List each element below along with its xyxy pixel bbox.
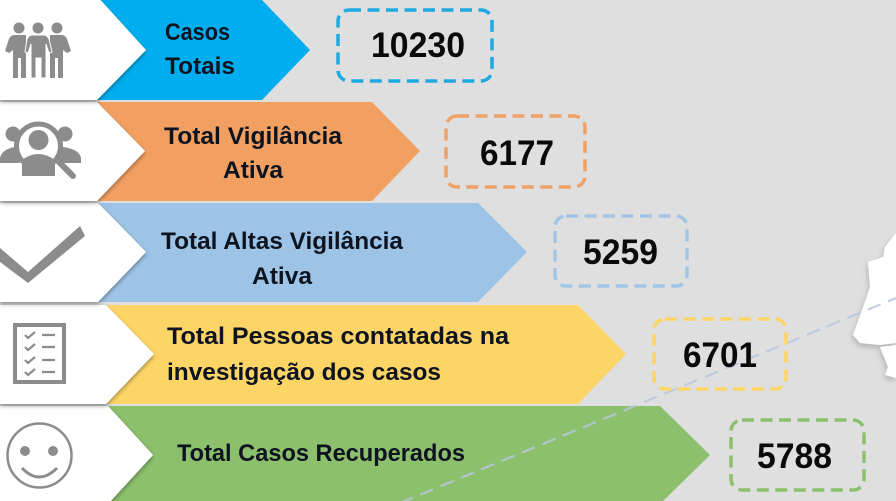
arrow: recovered [108,406,710,501]
band 1: total cases [0,0,310,100]
icon: check mark [0,226,85,283]
value box: 6177: 6177 [480,134,554,173]
band 4: contacted people [0,305,626,404]
value box: 6701: 6701 [683,336,757,375]
band 2: active surveillance [0,102,420,201]
label: Ativa [252,263,313,290]
label: Total Pessoas contatadas na [167,323,510,350]
value box: 5788 [731,420,864,490]
arrow: discharged [98,203,527,302]
value box: 5259 [555,216,687,286]
label: Casos [165,19,230,46]
label: Totais [165,53,235,80]
icon: smiley [8,424,72,488]
label [167,323,510,386]
label [164,123,343,184]
value box: 5788: 5788 [757,437,832,476]
arrow: surveillance [97,102,420,201]
label: Total Vigilância [164,123,343,150]
icon: three people [5,22,71,78]
label: Total Altas Vigilância [161,228,404,255]
white chevron [0,0,146,100]
value box: 10230 [338,10,492,81]
band 5: recovered cases [0,406,710,501]
icon: magnifier over people [0,124,81,176]
label: Ativa [223,157,284,184]
label: Total Casos Recuperados [177,440,465,467]
label [161,228,404,290]
value box: 5259: 5259 [583,233,658,272]
label [165,19,235,80]
map of territory [853,233,896,378]
icon: checklist [15,325,64,382]
value box: 6177 [446,116,585,187]
label: investigação dos casos [167,359,441,386]
value box: 10230: 10230 [371,26,465,65]
white chevron [0,203,146,302]
arrow: contacted [106,305,626,404]
value box: 6701 [654,319,786,389]
band 3: discharged from active surveillance [0,203,527,302]
dashed connector line [400,298,896,501]
white chevron [0,305,154,404]
white chevron [0,102,145,201]
white chevron [0,406,153,501]
arrow: total cases [97,0,310,100]
